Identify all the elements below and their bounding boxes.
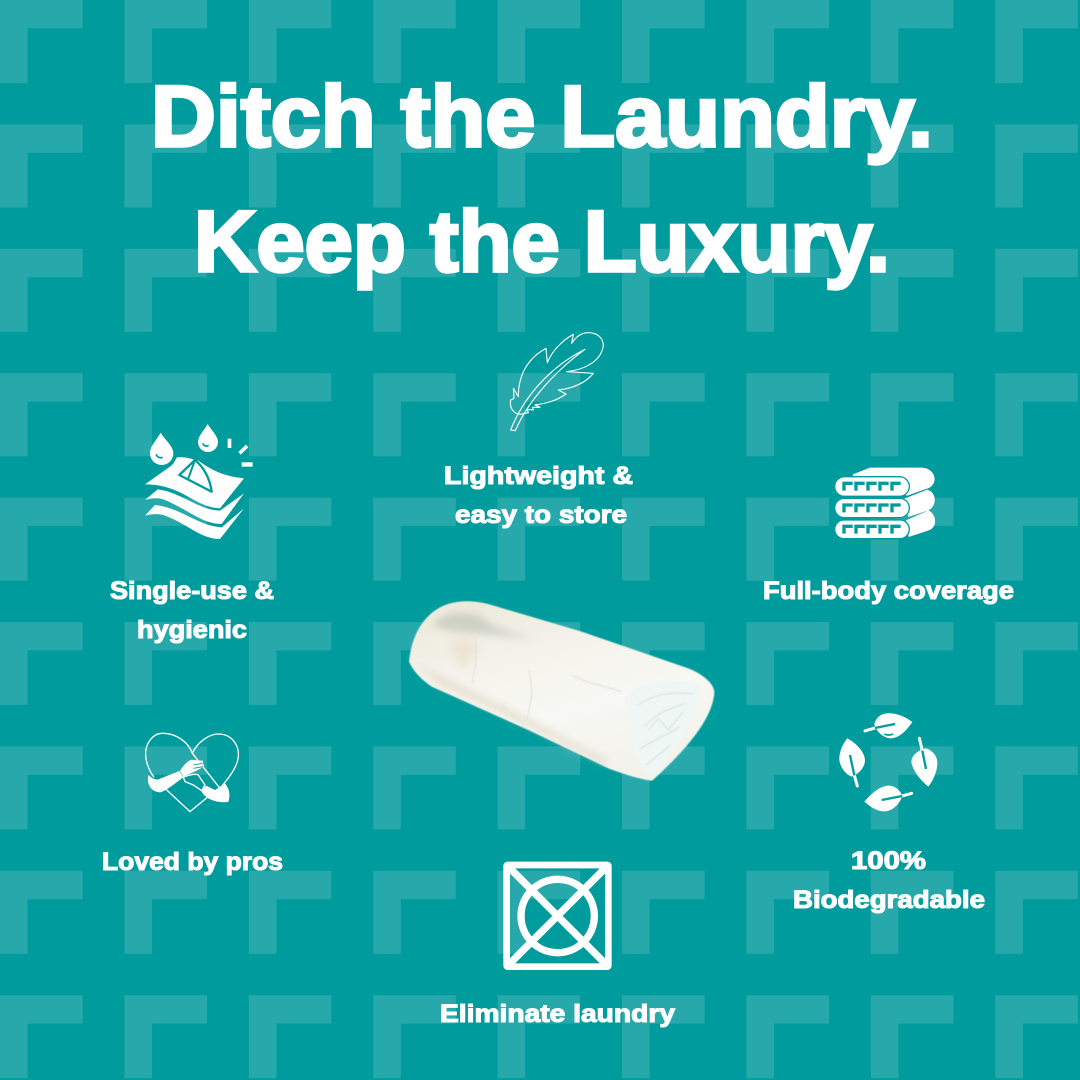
icon: heart with hands [146, 733, 238, 812]
roll end folds [638, 693, 693, 765]
panel: lightweight [444, 333, 633, 529]
icon: wet layered sheets [145, 424, 253, 539]
title [151, 69, 933, 290]
label: loved by pros: Loved by pros [102, 848, 283, 876]
label: biodegradable: 100% [851, 847, 926, 875]
label: full-body coverage: Full-body coverage [763, 577, 1014, 605]
label: lightweight: Lightweight & [444, 462, 633, 490]
label: single-use: Single-use & [110, 577, 274, 605]
roll print shading [415, 613, 608, 767]
label: lightweight [444, 462, 633, 529]
title: Ditch the Laundry. [151, 69, 933, 165]
panel: eliminate laundry [440, 865, 675, 1028]
label: biodegradable [793, 847, 985, 914]
panel: loved by pros [102, 733, 283, 876]
label: single-use: hygienic [137, 616, 247, 644]
panel: biodegradable [793, 713, 985, 914]
icon: do not tumble dry [507, 865, 608, 967]
roll body [409, 601, 714, 781]
label: single-use [110, 577, 274, 644]
icon: recycling leaves [839, 713, 937, 811]
icon: feather [510, 333, 603, 431]
panel: product roll [409, 601, 714, 781]
icon: stacked folded towels [835, 468, 935, 539]
panel: single-use [110, 424, 274, 644]
title: Keep the Luxury. [194, 194, 890, 290]
roll creases [472, 637, 622, 725]
label: eliminate laundry: Eliminate laundry [440, 1000, 675, 1028]
roll end face [625, 681, 700, 777]
label: lightweight: easy to store [455, 501, 627, 529]
panel: full-body coverage [763, 468, 1014, 605]
label: biodegradable: Biodegradable [793, 886, 985, 914]
